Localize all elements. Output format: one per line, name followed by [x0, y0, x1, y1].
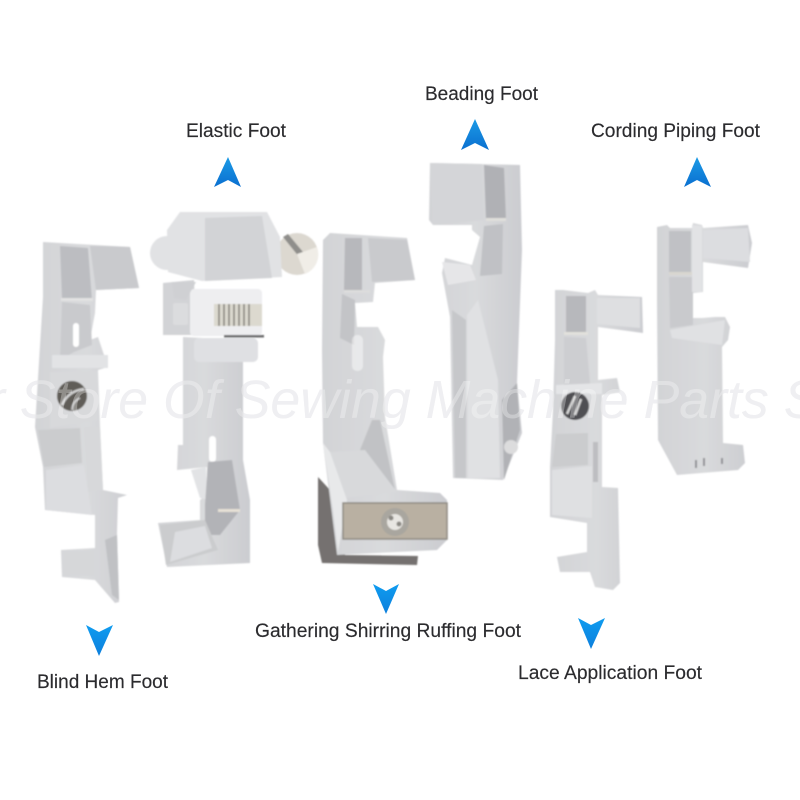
metal plate [343, 503, 447, 539]
icon: plate screw [381, 508, 409, 536]
label: beading foot: Beading Foot [425, 83, 539, 105]
arrow: lace application foot [578, 618, 605, 649]
foot: gathering shirring ruffing [318, 233, 447, 565]
foot: beading [429, 163, 522, 480]
foot: lace application [550, 290, 643, 590]
icon: screw [276, 233, 318, 275]
arrow: blind hem foot [86, 625, 113, 656]
foot: elastic [150, 212, 318, 567]
foot: blind hem [35, 242, 139, 603]
arrow: elastic foot [214, 157, 241, 187]
dark guide blade [318, 477, 418, 565]
arrow: beading foot [461, 119, 489, 150]
label: gathering shirring ruffing foot: Gathering Shirring Ruffing Foot [255, 620, 522, 642]
label: lace application foot: Lace Application Foot [518, 662, 703, 684]
arrow: cording piping foot [684, 157, 711, 187]
label: elastic foot: Elastic Foot [186, 120, 287, 142]
label: cording piping foot: Cording Piping Foot [591, 120, 761, 142]
arrow: gathering shirring ruffing foot [373, 584, 399, 614]
foot: cording piping [657, 223, 752, 475]
label: blind hem foot: Blind Hem Foot [37, 671, 169, 693]
